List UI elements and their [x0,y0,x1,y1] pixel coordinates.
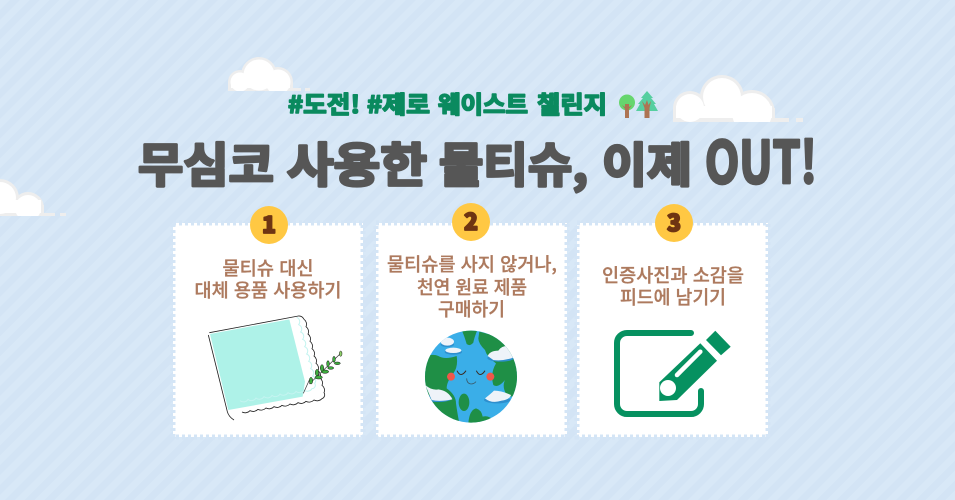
card 1 text: 물티슈 대신 [222,255,314,281]
card 2 text: 물티슈를 사지 않거나, [387,251,557,277]
cloud: top left [228,57,310,91]
icon: smiling earth [424,330,517,423]
badge 3: 3 [667,204,681,238]
panel: step 2 [376,203,567,437]
card 3 text: 인증사진과 소감을 [602,262,744,288]
card 1 text: 대체 용품 사용하기 [194,277,342,303]
face [447,371,494,384]
icon: trees [619,91,658,118]
main title [138,116,817,200]
badge 2 [452,203,490,241]
panel: step 3 [577,204,768,437]
main title: 물티슈, [439,127,588,196]
card 2 text [387,251,557,322]
badge 1 [250,206,288,244]
hashtag heading: #도전! [288,85,360,120]
main title: 이제 [602,127,692,196]
badge 2: 2 [464,203,478,237]
card 3 text [602,262,744,310]
icon: edit pencil [617,331,731,414]
cloud: left edge [0,179,66,216]
badge 3 [655,204,693,242]
card 2 background [376,223,567,437]
card 3 text: 피드에 남기기 [620,284,726,310]
card 1 text [194,255,342,303]
card 3 background [577,223,768,437]
hashtag heading [288,85,607,120]
main title: 사용한 [287,127,427,196]
hashtag heading: #제로 [367,85,430,120]
panel: step 1 [173,206,363,437]
cloud: top right [673,75,803,122]
badge 1: 1 [262,206,276,240]
card 2 text: 구매하기 [438,296,505,322]
card 1 background [173,223,363,437]
main title: 무심코 [138,127,274,196]
card 2 text: 천연 원료 제품 [417,274,527,300]
hashtag heading: 챌린지 [537,85,607,120]
icon: handkerchief [208,316,342,420]
earth clouds [424,338,514,403]
hashtag heading: 웨이스트 [438,85,528,120]
main title: OUT! [705,116,817,200]
